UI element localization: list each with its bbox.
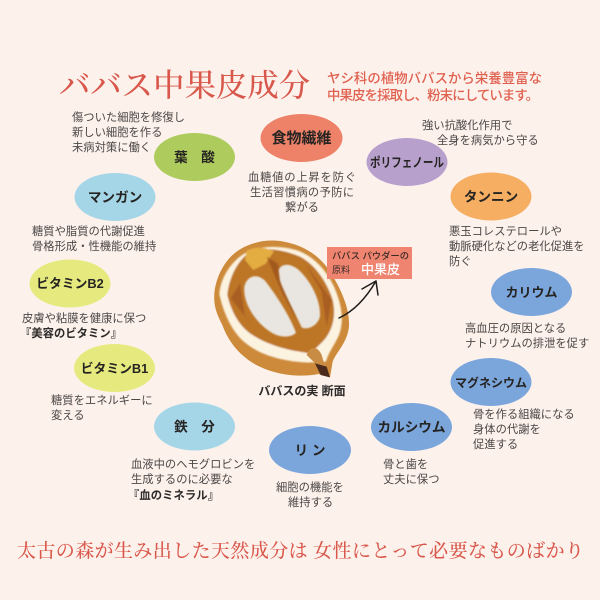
nutrient: ポリフェノール — [366, 138, 448, 186]
nutrient: マグネシウム: マグネシウム — [455, 375, 527, 390]
description: カルシウム: 丈夫に保つ — [383, 472, 440, 486]
description: 鉄分: 生成するのに必要な — [131, 472, 233, 486]
subtitle: ヤシ科の植物ババスから栄養豊富な — [327, 70, 542, 86]
description: ビタミンB1 — [51, 393, 153, 422]
callout: 中果皮: 中果皮 — [361, 262, 400, 277]
description: ポリフェノール — [422, 118, 539, 147]
nutrient: マグネシウム — [450, 358, 532, 406]
footer message: 太古の森が生み出した天然成分は 女性にとって必要なものばかり — [17, 540, 584, 562]
arrow: callout to mesocarp — [339, 281, 378, 318]
description: 鉄分: 『血のミネラル』 — [128, 488, 219, 502]
description: マンガン: 骨格形成・性機能の維持 — [32, 239, 156, 253]
description: カリウム — [465, 321, 589, 350]
nutrient: マンガン — [74, 173, 156, 221]
description: リン: 細胞の機能を — [276, 480, 344, 494]
description: 食物繊維: 繋がる — [285, 200, 319, 214]
description: ビタミンB2: 『美容のビタミン』 — [20, 326, 122, 340]
description: カリウム: ナトリウムの排泄を促す — [465, 336, 589, 350]
description: マグネシウム: 骨を作る組織になる — [473, 407, 575, 421]
description: 葉酸: 新しい細胞を作る — [72, 125, 162, 139]
description: リン — [276, 480, 344, 509]
description: 食物繊維: 生活習慣病の予防に — [250, 185, 354, 199]
description: タンニン: 動脈硬化などの老化促進を — [449, 239, 585, 253]
nutrient: ビタミンB2: ビタミンB2 — [36, 276, 104, 291]
description: 鉄分: 血液中のヘモグロビンを — [131, 457, 255, 471]
description: マグネシウム: 身体の代謝を — [473, 422, 541, 436]
nutrient: 葉酸: 葉 酸 — [174, 149, 215, 165]
nutrient: 食物繊維: 食物繊維 — [271, 129, 332, 147]
description: タンニン: 悪玉コレステロールや — [449, 225, 562, 238]
subtitle: 中果皮を採取し、粉末にしています。 — [327, 88, 539, 103]
description: 食物繊維 — [248, 170, 356, 214]
subtitle — [327, 70, 542, 103]
description: マグネシウム: 促進する — [473, 437, 518, 451]
description: ポリフェノール: 強い抗酸化作用で — [422, 118, 512, 132]
nutrient: カルシウム — [371, 403, 452, 451]
description: ビタミンB2 — [20, 311, 146, 340]
description: 食物繊維: 血糖値の上昇を防ぐ — [248, 170, 356, 184]
description: リン: 維持する — [288, 495, 333, 509]
description: タンニン — [449, 225, 585, 268]
callout: 中果皮: ババス パウダーの — [332, 250, 409, 261]
illustration: babassu nut cross-section — [214, 241, 349, 377]
nutrient: マンガン: マンガン — [88, 190, 142, 205]
description: マンガン — [32, 224, 156, 253]
description: マグネシウム — [473, 407, 575, 451]
title: ババス中果皮成分 — [59, 68, 310, 103]
nutrient: カルシウム: カルシウム — [378, 420, 445, 435]
description: ポリフェノール: 全身を病気から守る — [437, 133, 539, 147]
callout: 中果皮 — [327, 247, 412, 279]
nutrient: 葉酸 — [154, 133, 235, 181]
description: 葉酸: 傷ついた細胞を修復し — [72, 110, 185, 124]
nutrient: カリウム — [491, 268, 572, 316]
nutrient: リン — [269, 426, 351, 474]
nutrient: リン: リ ン — [295, 443, 325, 458]
description: ビタミンB1: 糖質をエネルギーに — [51, 393, 153, 407]
nutrient: タンニン — [450, 172, 532, 220]
nutrient: カリウム: カリウム — [505, 285, 558, 300]
description: カルシウム — [383, 458, 440, 486]
nutrient: ビタミンB1: ビタミンB1 — [81, 361, 148, 376]
nutrient: 鉄分: 鉄 分 — [174, 418, 215, 434]
description: カリウム: 高血圧の原因となる — [465, 321, 566, 335]
nutrient: タンニン: タンニン — [464, 190, 518, 204]
nutrient: 鉄分 — [154, 402, 235, 450]
description: カルシウム: 骨と歯を — [383, 458, 428, 471]
description: 葉酸 — [72, 110, 185, 154]
description: ビタミンB2: 皮膚や粘膜を健康に保つ — [22, 311, 146, 325]
nutrient: 食物繊維 — [260, 114, 342, 162]
nutrient: ビタミンB2 — [30, 260, 110, 308]
nutrient: ビタミンB1 — [74, 344, 155, 392]
callout: 中果皮: 原料 — [332, 264, 350, 275]
description: 鉄分 — [128, 457, 255, 502]
description: ビタミンB1: 変える — [51, 409, 85, 422]
description: 葉酸: 未病対策に働く — [72, 140, 151, 154]
nutrient: ポリフェノール: ポリフェノール — [370, 155, 444, 170]
caption: nut cross-section: ババスの実 断面 — [258, 383, 346, 398]
description: タンニン: 防ぐ — [449, 254, 472, 268]
description: マンガン: 糖質や脂質の代謝促進 — [32, 224, 145, 238]
